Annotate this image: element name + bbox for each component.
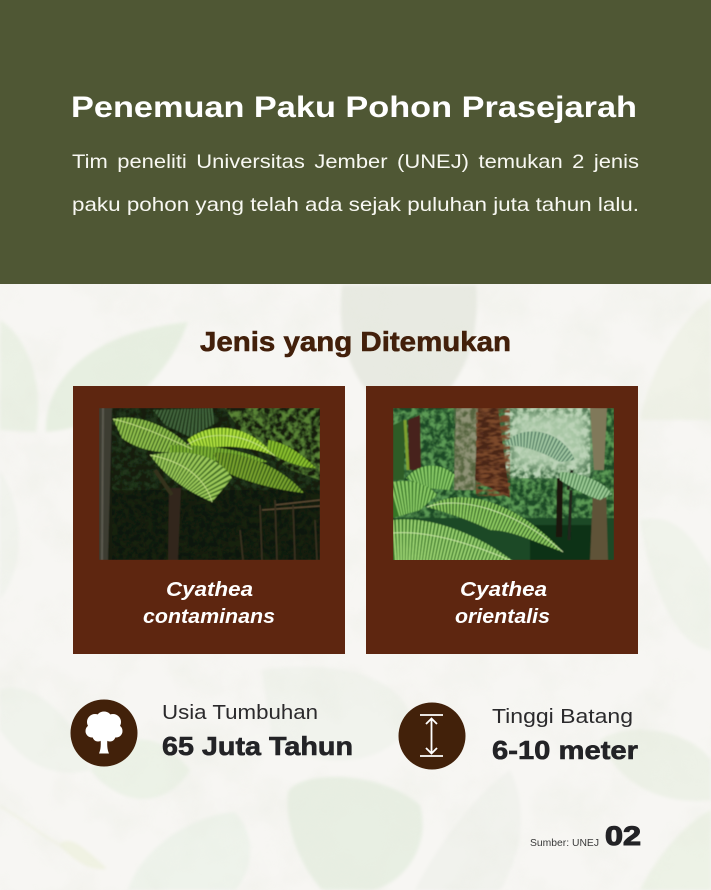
intro text: paku pohon yang telah ada sejak puluhan juta tahun lalu.: [72, 194, 639, 216]
species name: Cyathea: [166, 579, 253, 601]
stat: trunk height: [398, 702, 638, 770]
fronds: [505, 431, 575, 462]
photo: tree fern rainforest: [393, 408, 614, 562]
species name: [455, 579, 550, 628]
value: 65 Juta Tahun: [162, 731, 353, 761]
source note: Sumber: UNEJ: [530, 837, 599, 849]
label: Usia Tumbuhan: [162, 702, 318, 724]
icon: tree: [70, 700, 138, 766]
fronds: [159, 410, 214, 436]
stat: plant age: [70, 700, 353, 766]
value: 6-10 meter: [492, 735, 638, 765]
panel: Cyathea orientalis: [366, 386, 638, 654]
title: Penemuan Paku Pohon Prasejarah: [71, 91, 637, 124]
intro text: Tim peneliti Universitas Jember (UNEJ) temukan 2 jenis: [72, 151, 639, 173]
section heading: Jenis yang Ditemukan: [200, 326, 511, 357]
species name: [143, 579, 275, 628]
species name: contaminans: [143, 606, 275, 628]
species name: orientalis: [455, 606, 550, 628]
icon: height arrow: [398, 702, 466, 770]
photo: tree fern in dark forest: [99, 408, 320, 560]
species name: Cyathea: [460, 579, 547, 601]
panel: Cyathea contaminans: [73, 386, 345, 654]
intro text: [72, 151, 639, 216]
header band: [0, 0, 711, 284]
background: paper with pale leaves: [0, 284, 711, 890]
page number: 02: [605, 821, 641, 851]
label: Tinggi Batang: [492, 706, 633, 728]
